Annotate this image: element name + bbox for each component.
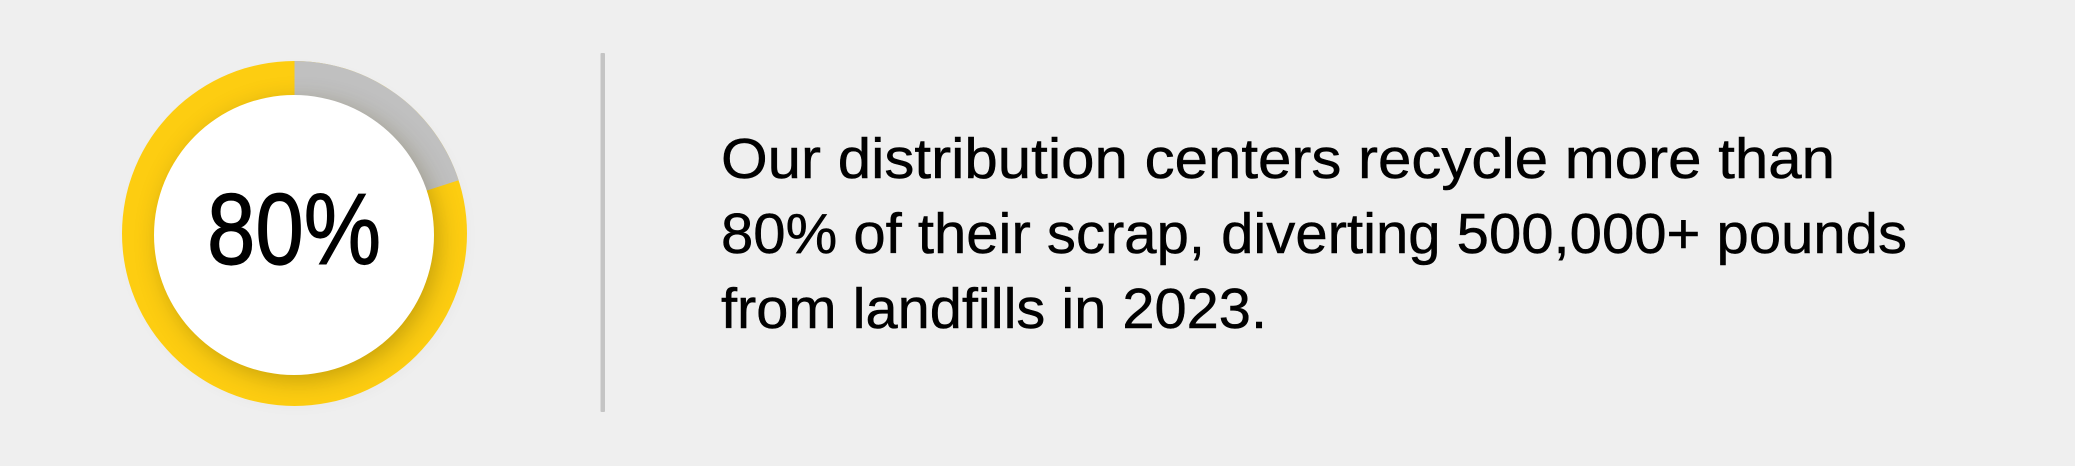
infographic canvas xyxy=(122,53,1906,412)
inner white circle xyxy=(154,95,434,375)
soft outer shadow xyxy=(125,65,469,409)
ring segment: 20 percent gray xyxy=(294,61,459,233)
line 1: Our distribution centers recycle more than xyxy=(721,127,1835,191)
donut chart: 80 percent xyxy=(122,61,469,409)
vertical divider xyxy=(600,53,605,412)
description text block xyxy=(721,127,1907,341)
ring segment: 80 percent yellow xyxy=(122,61,467,406)
line 2: 80% of their scrap, diverting 500,000+ pounds xyxy=(721,202,1907,266)
percentage label: 80% xyxy=(207,174,381,286)
inner shadow on ring xyxy=(161,103,437,379)
line 3: from landfills in 2023. xyxy=(721,277,1267,341)
